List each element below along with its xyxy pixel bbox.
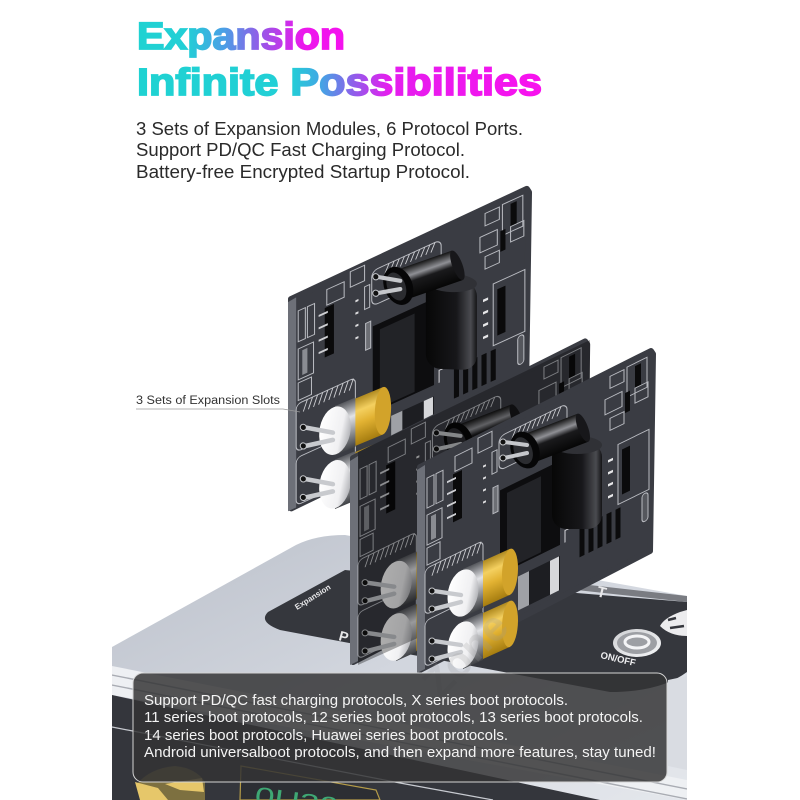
green display bbox=[240, 766, 380, 800]
panel text: Support PD/QC fast charging protocols, X series boot protocols. bbox=[144, 693, 568, 709]
plate rim bbox=[580, 585, 687, 602]
slots label with leader line: 3 Sets of Expansion Slots bbox=[136, 395, 280, 407]
panel text: Android universalboot protocols, and then expand more features, stay tuned! bbox=[144, 745, 656, 761]
title: Expansion bbox=[137, 16, 345, 58]
panel text bbox=[144, 693, 656, 761]
expansion board 1 bbox=[288, 180, 529, 521]
logo on front face bbox=[135, 766, 205, 800]
subtitle text block: 3 Sets of Expansion Modules, 6 Protocol Ports. bbox=[136, 119, 523, 139]
subtitle text block: Support PD/QC Fast Charging Protocol. bbox=[136, 140, 465, 160]
title bbox=[137, 16, 542, 104]
power button bbox=[613, 629, 661, 657]
device front edge stripes bbox=[112, 666, 687, 800]
dark control plate bbox=[265, 570, 687, 692]
plate mark: P bbox=[337, 627, 350, 645]
base device bbox=[112, 535, 687, 800]
title: Infinite Possibilities bbox=[137, 62, 542, 104]
thin light line on front face bbox=[112, 727, 493, 800]
info panel bbox=[133, 673, 667, 782]
panel text: 11 series boot protocols, 12 series boot protocols, 13 series boot protocols. bbox=[144, 710, 643, 726]
right side face bbox=[668, 676, 687, 770]
plate print label left: Expansion bbox=[293, 583, 332, 612]
slots label with leader line bbox=[136, 395, 300, 412]
subtitle text block bbox=[136, 119, 523, 182]
plate mark right: T bbox=[595, 583, 608, 602]
skull logo bbox=[660, 610, 687, 636]
expansion board 2 bbox=[350, 340, 590, 665]
subtitle text block: Battery-free Encrypted Startup Protocol. bbox=[136, 162, 470, 182]
panel text: 14 series boot protocols, Huawei series boot protocols. bbox=[144, 728, 508, 744]
on/off label: ON/OFF bbox=[599, 650, 637, 669]
device front face bbox=[112, 695, 600, 800]
device top surface bbox=[112, 535, 687, 800]
expansion board 3 bbox=[417, 351, 653, 673]
watermark: Zone bbox=[413, 602, 517, 706]
